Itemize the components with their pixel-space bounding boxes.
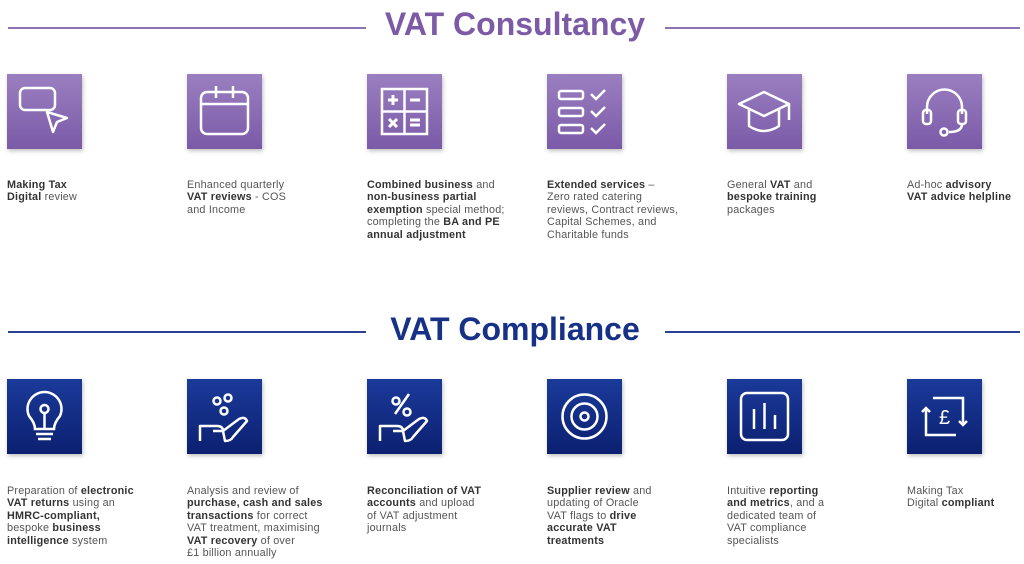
text: supplier review: treatments — [547, 535, 604, 547]
icon: cursor — [7, 74, 82, 149]
title: VAT Consultancy: VAT Consultancy — [385, 6, 645, 42]
text: partial exemption: exemption special method; — [367, 204, 505, 216]
text: transactions: transactions for correct — [187, 510, 308, 522]
text: reporting: VAT compliance — [727, 522, 807, 534]
text: reconciliation: Reconciliation of VAT — [367, 485, 481, 497]
icon: bar chart — [727, 379, 802, 454]
text: electronic returns: intelligence system — [7, 535, 107, 547]
text: extended services: Zero rated catering — [547, 191, 642, 203]
text: supplier review: updating of Oracle — [547, 497, 639, 509]
text: quarterly reviews: and Income — [187, 204, 245, 216]
text: extended services: Extended services – — [547, 179, 655, 191]
text: MTD review: Making Tax — [7, 179, 67, 191]
text: MTD compliant: Digital compliant — [907, 497, 994, 509]
text: quarterly reviews: VAT reviews - COS — [187, 191, 286, 203]
text: transactions: Analysis and review of — [187, 485, 299, 497]
text: extended services: reviews, Contract reviews, — [547, 204, 678, 216]
text: MTD review: Digital review — [7, 191, 77, 203]
text: reporting: Intuitive reporting — [727, 485, 818, 497]
text: training: bespoke training — [727, 191, 817, 203]
icon: calendar — [187, 74, 262, 149]
text: electronic returns: VAT returns using an — [7, 497, 115, 509]
icon: graduation cap — [727, 74, 802, 149]
text: reporting: dedicated team of — [727, 510, 816, 522]
icon: hand percent — [367, 379, 442, 454]
text: partial exemption: annual adjustment — [367, 229, 466, 241]
icon: pound exchange — [907, 379, 982, 454]
text: training: General VAT and — [727, 179, 812, 191]
icon: target — [547, 379, 622, 454]
text: extended services: Capital Schemes, and — [547, 216, 657, 228]
text: extended services — [547, 179, 678, 241]
icon: hand coins — [187, 379, 262, 454]
text: MTD compliant — [907, 485, 994, 509]
text: reconciliation: of VAT adjustment — [367, 510, 457, 522]
icon: headset — [907, 74, 982, 149]
text: MTD compliant: Making Tax — [907, 485, 963, 497]
icon: checklist — [547, 74, 622, 149]
text: transactions: VAT treatment, maximising — [187, 522, 320, 534]
text: supplier review — [547, 485, 652, 547]
text: partial exemption: non-business partial — [367, 191, 477, 203]
text: reconciliation — [366, 485, 481, 534]
text: transactions: £1 billion annually — [187, 547, 277, 559]
text: reporting — [727, 485, 824, 547]
text: training — [727, 179, 817, 216]
icon: lightbulb — [7, 379, 82, 454]
text: partial exemption — [367, 179, 505, 241]
text: electronic returns: HMRC-compliant, — [7, 510, 100, 522]
text: training: packages — [727, 204, 775, 216]
text: helpline — [907, 179, 1011, 203]
text: transactions — [187, 485, 323, 559]
title: VAT Compliance: VAT Compliance — [390, 311, 640, 347]
text: electronic returns — [7, 485, 134, 547]
text: MTD review — [7, 179, 77, 203]
text: supplier review: Supplier review and — [547, 485, 652, 497]
text: electronic returns: Preparation of electronic — [7, 485, 134, 497]
text: transactions: purchase, cash and sales — [187, 497, 323, 509]
text: reporting: specialists — [727, 535, 779, 547]
text: quarterly reviews: Enhanced quarterly — [187, 179, 284, 191]
text: reporting: and metrics, and a — [727, 497, 824, 509]
text: transactions: VAT recovery of over — [187, 535, 295, 547]
text: electronic returns: bespoke business — [7, 522, 101, 534]
icon: calculator — [367, 74, 442, 149]
text: supplier review: accurate VAT — [547, 522, 617, 534]
text: reconciliation: journals — [367, 522, 406, 534]
text: reconciliation: accounts and upload — [367, 497, 475, 509]
text: supplier review: VAT flags to drive — [547, 510, 636, 522]
text: extended services: Charitable funds — [547, 229, 629, 241]
text: helpline: Ad-hoc advisory — [907, 179, 992, 191]
text: partial exemption: completing the BA and PE — [367, 216, 500, 228]
text: quarterly reviews — [187, 179, 286, 216]
icon: pound exchange: £ — [939, 407, 950, 429]
text: helpline: VAT advice helpline — [907, 191, 1011, 203]
text: partial exemption: Combined business and — [367, 179, 495, 191]
